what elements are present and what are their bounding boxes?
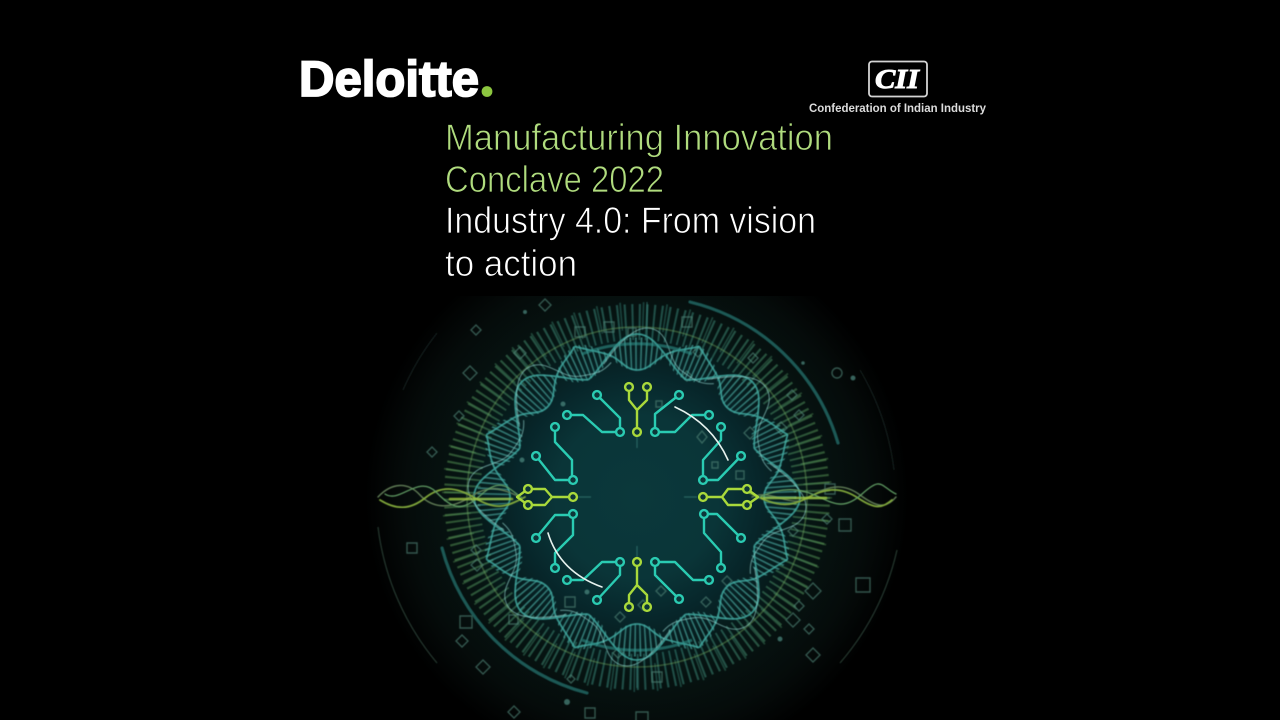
logo: Deloitte: Deloitte [299,51,479,107]
center guide lines [578,302,697,688]
logo: CII [809,62,987,115]
heading: subtitle: to action [445,243,577,284]
thick accent arcs [442,302,838,693]
DNA rungs [492,352,782,642]
dark radial backdrop [396,296,879,720]
glowing dots [520,310,856,705]
heading: subtitle: Industry 4.0: From vision [445,200,816,241]
circuit traces: green [517,383,758,611]
heading: subtitle [445,200,816,284]
outer thin arcs [378,333,897,663]
circuit traces: teal [532,391,745,604]
white arcs [548,407,728,587]
logo: CII: Confederation of Indian Industry [809,103,987,115]
horizontal wave: left [378,485,525,507]
heading: conclave title: Manufacturing Innovation [445,117,833,158]
radial tick ring [456,316,818,678]
heading: conclave title [445,117,833,200]
heading: conclave title: Conclave 2022 [445,159,664,200]
DNA strands [461,321,813,673]
illustration: circuit and DNA ring [376,296,898,720]
horizontal wave: right [750,484,896,506]
logo: CII: CII [875,64,921,94]
scattered diamonds and squares [407,299,870,720]
